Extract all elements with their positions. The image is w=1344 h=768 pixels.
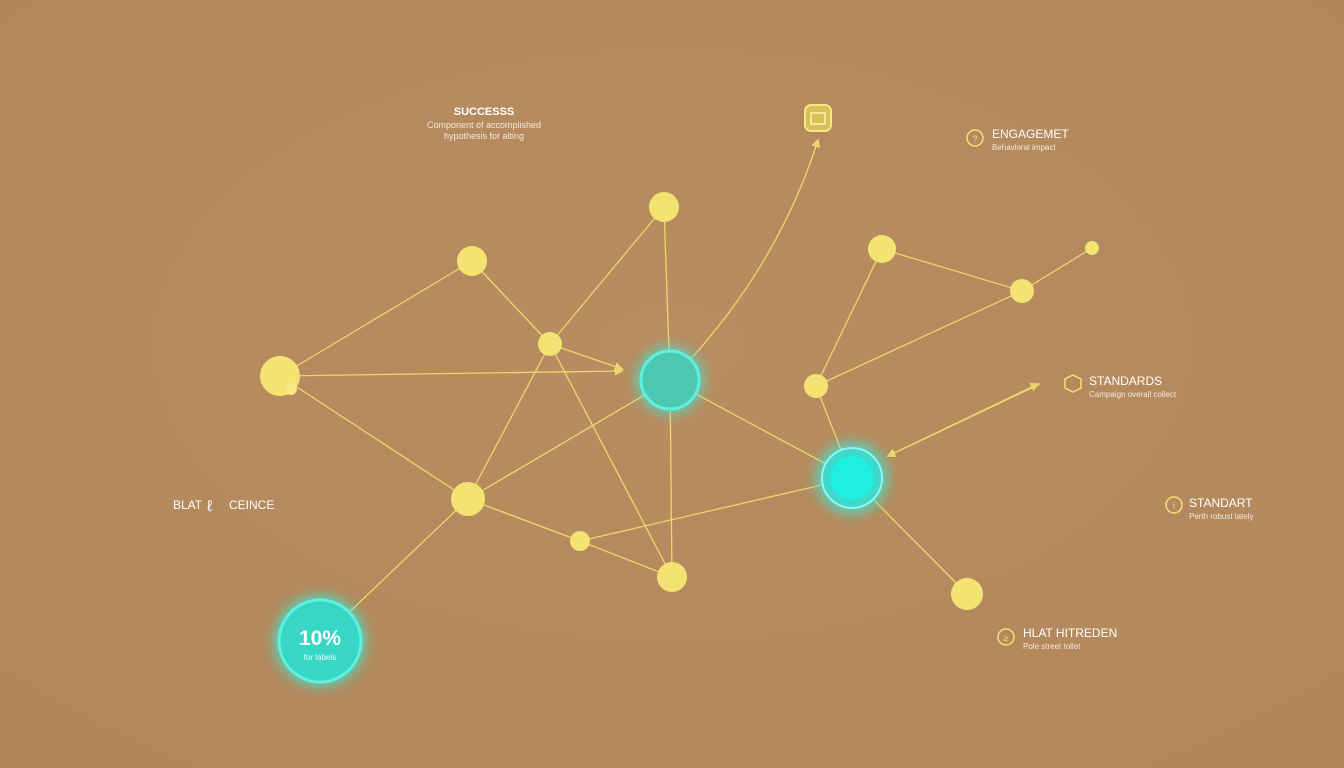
cyan node right <box>816 442 888 514</box>
network edges <box>280 140 1092 640</box>
label: engagement: ENGAGEMET <box>992 127 1069 141</box>
label: standards <box>1065 374 1177 399</box>
label: blat ceince: CEINCE <box>229 498 274 512</box>
label: standart: i <box>1173 501 1175 511</box>
yellow nodes <box>260 192 1099 610</box>
label: standards: Campaign overall collect <box>1089 390 1177 399</box>
label: blat ceince: ℓ <box>207 498 212 515</box>
stat circle 10%: 10% <box>299 627 341 650</box>
stat circle 10%: for labels <box>304 653 336 662</box>
label: standart: STANDART <box>1189 496 1253 510</box>
label: hlat hitreden: HLAT HITREDEN <box>1023 626 1117 640</box>
label: blat ceince: BLAT <box>173 498 203 512</box>
label: hlat hitreden: ≥ <box>1004 633 1009 643</box>
stat circle 10% <box>274 595 366 687</box>
label: engagement: Behavioral impact <box>992 143 1056 152</box>
label: engagement: ? <box>972 134 978 144</box>
label: success <box>427 106 541 141</box>
label: blat ceince <box>173 498 274 515</box>
label: engagement <box>967 127 1069 152</box>
label: success: hypothesis for alting <box>444 131 524 141</box>
label: success: Component of accomplished <box>427 120 541 130</box>
icon: top box <box>805 105 831 131</box>
label: hlat hitreden <box>998 626 1117 651</box>
label: standart: Perth robust lately <box>1189 512 1253 521</box>
label: standards: STANDARDS <box>1089 374 1162 388</box>
label: hlat hitreden: Pole street tollet <box>1023 642 1081 651</box>
label: standart <box>1166 496 1253 521</box>
label: success: SUCCESSS <box>454 106 514 118</box>
cyan hub node <box>636 346 704 414</box>
